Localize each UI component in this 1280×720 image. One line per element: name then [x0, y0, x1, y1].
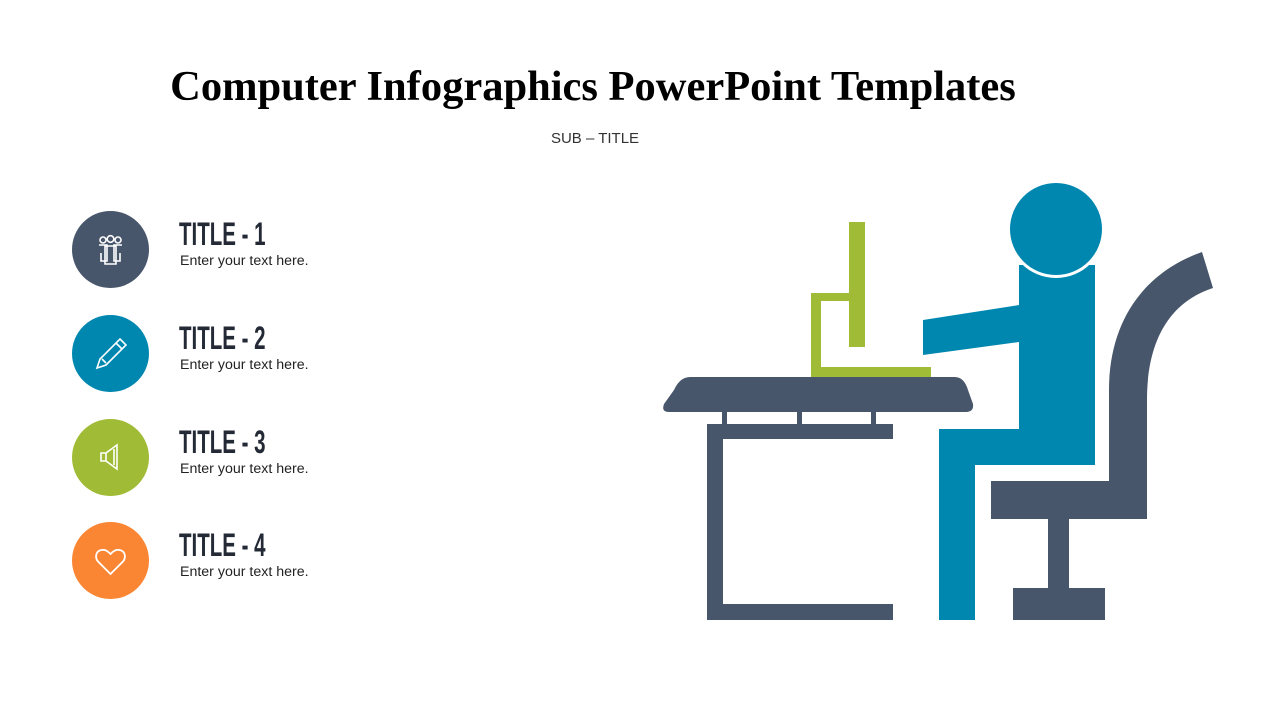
icon: speaker — [72, 419, 149, 496]
text 2: Enter your text here. — [180, 357, 309, 373]
item 1 — [72, 211, 309, 288]
chair — [991, 252, 1213, 620]
item 3 — [72, 419, 309, 496]
text 1: Enter your text here. — [180, 253, 309, 269]
heading 3: TITLE - 3 — [179, 424, 265, 460]
desk — [663, 377, 973, 620]
text 4: Enter your text here. — [180, 564, 309, 580]
icon: pencil — [72, 315, 149, 392]
title: Computer Infographics PowerPoint Templates — [170, 63, 1016, 110]
person — [923, 180, 1105, 620]
icon: people — [72, 211, 149, 288]
subtitle: SUB – TITLE — [551, 130, 639, 147]
heading 4: TITLE - 4 — [179, 527, 265, 563]
heading 2: TITLE - 2 — [179, 320, 265, 356]
icon: heart — [72, 522, 149, 599]
item 4 — [72, 522, 309, 599]
item 2 — [72, 315, 309, 392]
heading 1: TITLE - 1 — [179, 216, 265, 252]
monitor — [811, 222, 931, 377]
text 3: Enter your text here. — [180, 461, 309, 477]
